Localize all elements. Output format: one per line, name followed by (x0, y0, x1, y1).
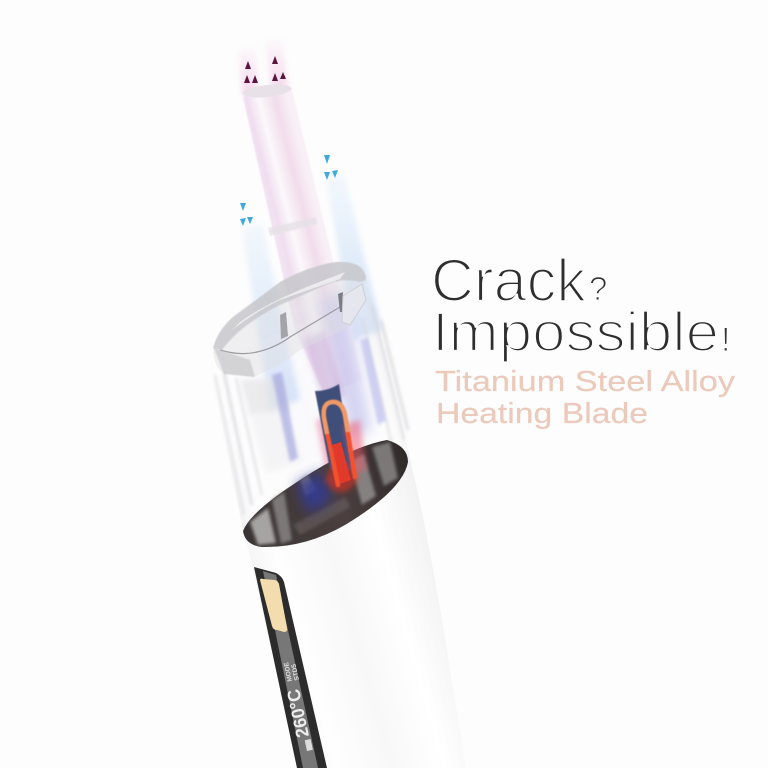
subheading (435, 366, 736, 430)
subheading: Heating Blade (436, 398, 648, 430)
gold button (260, 579, 287, 632)
temperature reading: 260°C (283, 687, 313, 739)
heading: Crack (431, 247, 587, 314)
vapour glow above tube (238, 38, 288, 96)
purple air glow inside pod (272, 290, 386, 470)
heading: ! (721, 321, 730, 359)
vapour arrows (244, 56, 286, 83)
pod walls (210, 296, 408, 530)
subheading: Titanium Steel Alloy (435, 366, 736, 398)
right air flow: blue stream and arrows (324, 155, 382, 340)
pod opening: dark interior (243, 440, 408, 547)
device body (243, 450, 466, 768)
pod top rim (213, 262, 366, 377)
heating blade (315, 384, 366, 492)
display panel (254, 567, 327, 768)
battery icon (305, 739, 313, 751)
left air flow: blue stream and arrows (240, 203, 300, 410)
heading (431, 247, 730, 363)
illustration: heating device (210, 38, 466, 768)
heading: Impossible (432, 300, 719, 363)
session details: MODE (283, 661, 294, 682)
session time: STD5 (291, 663, 301, 681)
heading: ? (589, 270, 607, 307)
tube (242, 82, 362, 395)
